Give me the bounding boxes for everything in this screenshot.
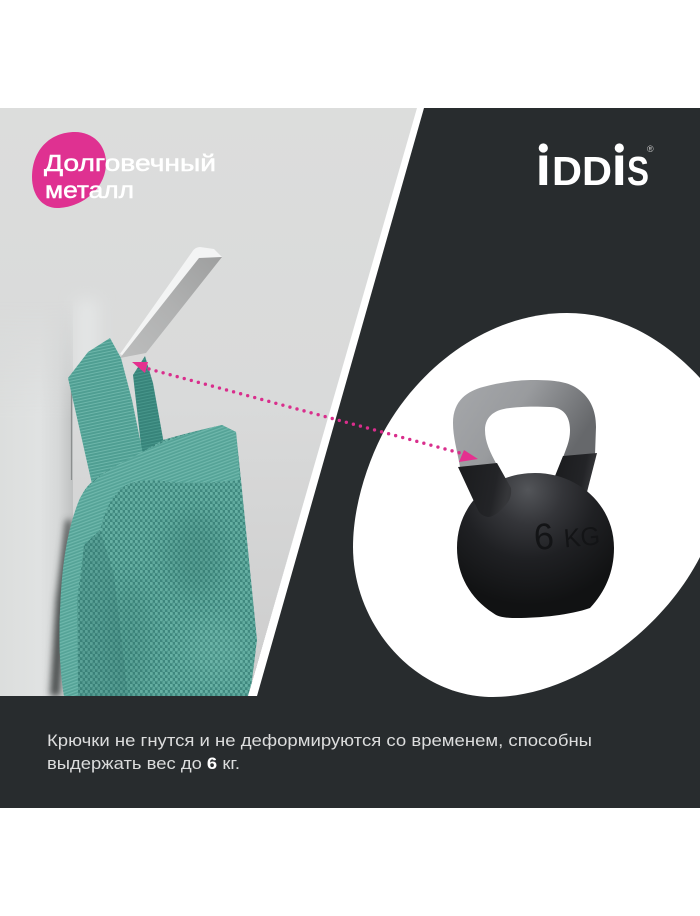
heading — [44, 150, 216, 203]
towel shading — [116, 516, 232, 691]
towel collar hem — [60, 425, 240, 696]
panel: hook and towel photo — [0, 108, 430, 700]
heading: металл — [45, 177, 134, 203]
handle — [453, 380, 596, 467]
heading: Долговечный — [44, 150, 216, 176]
towel shadow — [50, 520, 72, 696]
dark background panel — [0, 108, 700, 808]
towel body — [60, 425, 257, 696]
logo: IDDIS: i — [536, 134, 551, 197]
description text — [47, 731, 592, 773]
hook — [120, 247, 222, 358]
towel front strap — [68, 338, 143, 484]
logo: IDDIS: i — [612, 134, 627, 197]
weight label: 6 KG — [532, 511, 601, 558]
logo: IDDIS — [535, 134, 654, 197]
hook plate on wall — [0, 300, 98, 696]
wall — [0, 108, 430, 696]
description text: Крючки не гнутся и не деформируются со временем, способны — [47, 731, 592, 750]
logo: IDDIS: S — [627, 148, 649, 194]
right sleeve — [555, 453, 597, 492]
white blob behind kettlebell — [353, 313, 700, 697]
towel back strap — [133, 356, 164, 454]
dotted line — [149, 369, 460, 453]
white diagonal stripe — [248, 108, 424, 696]
arrowhead on kettlebell handle — [459, 450, 478, 462]
towel fold shade — [78, 530, 128, 696]
logo: IDDIS: DD — [552, 148, 612, 194]
pink accent blob — [32, 132, 106, 208]
ball — [457, 473, 614, 618]
left sleeve — [458, 463, 511, 517]
pink dotted arrow — [132, 362, 478, 462]
logo: IDDIS: ® — [647, 144, 654, 154]
description text: выдержать вес до 6 кг. — [47, 754, 240, 773]
arrowhead near hook — [132, 362, 148, 373]
kettlebell — [453, 380, 614, 618]
